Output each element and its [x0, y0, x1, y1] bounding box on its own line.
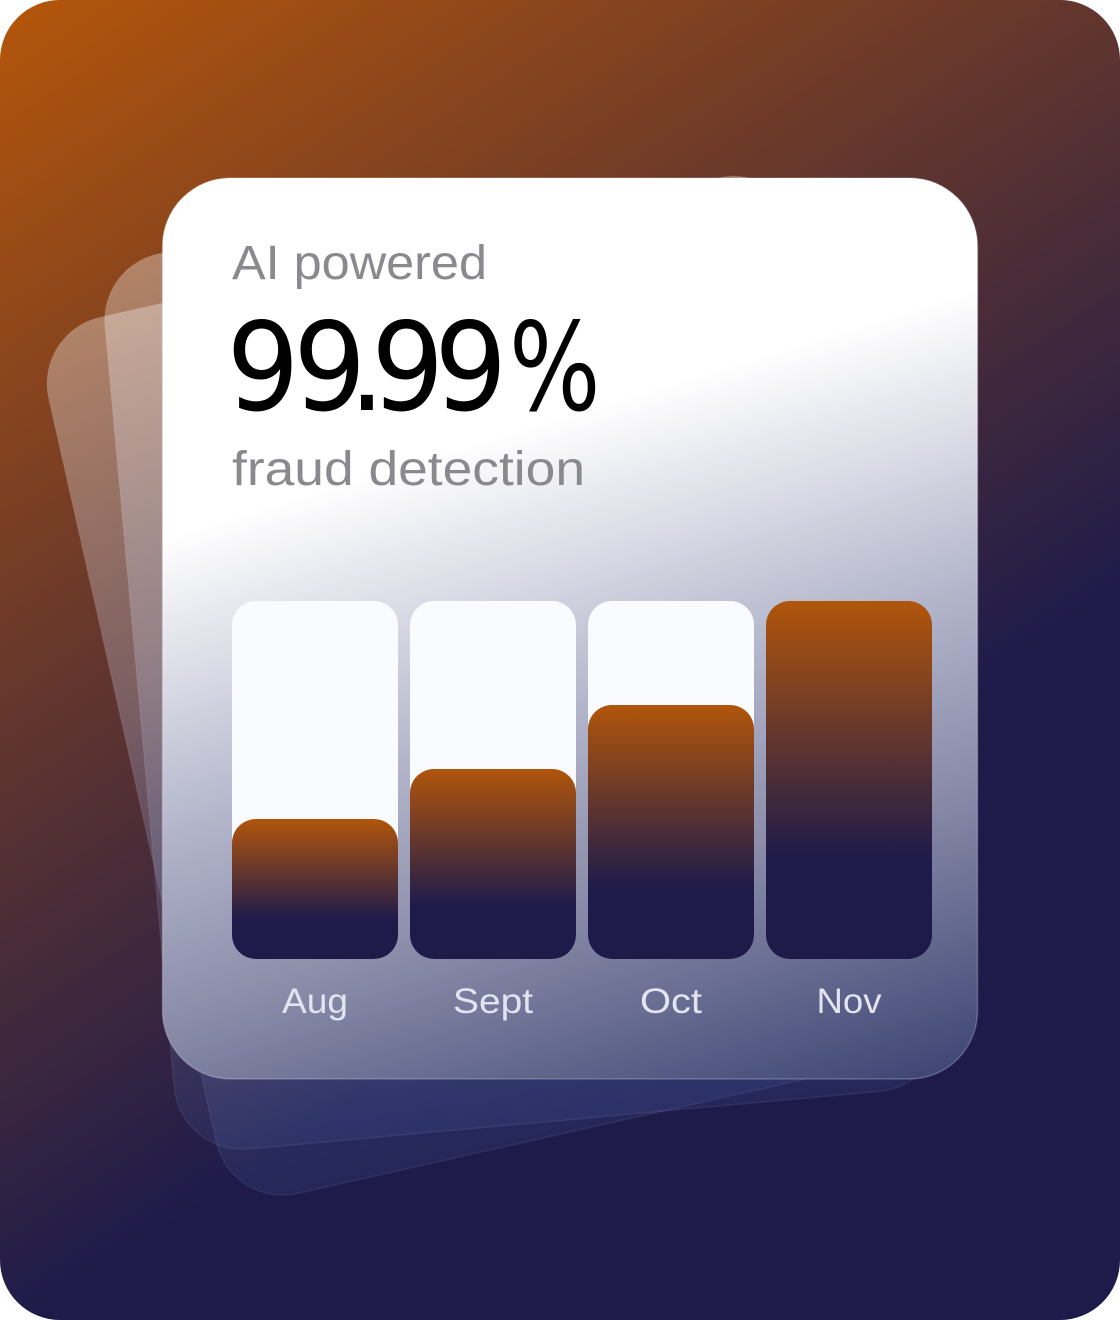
heading: AI powered: AI powered: [232, 237, 487, 290]
back card: most rotated: [34, 163, 982, 1208]
bar: Sept: Sept: [453, 982, 533, 1021]
bar: Nov: [766, 601, 932, 1021]
bar: Nov: Nov: [816, 982, 882, 1021]
headline figure: 99.99%: 99.99: [227, 297, 507, 439]
bar: Oct: Oct: [640, 982, 702, 1021]
bar: Sept: [410, 601, 576, 1021]
subheading: fraud detection: fraud detection: [232, 443, 585, 496]
card surface: [162, 178, 978, 1079]
bar: Aug: Aug: [282, 982, 348, 1021]
bar chart: [232, 601, 932, 1021]
bar: Aug: [232, 601, 398, 1021]
bar: Oct: [588, 601, 754, 1021]
main card: [162, 178, 978, 1079]
headline figure: 99.99%: %: [509, 297, 601, 439]
back card: slightly rotated: [99, 189, 947, 1155]
